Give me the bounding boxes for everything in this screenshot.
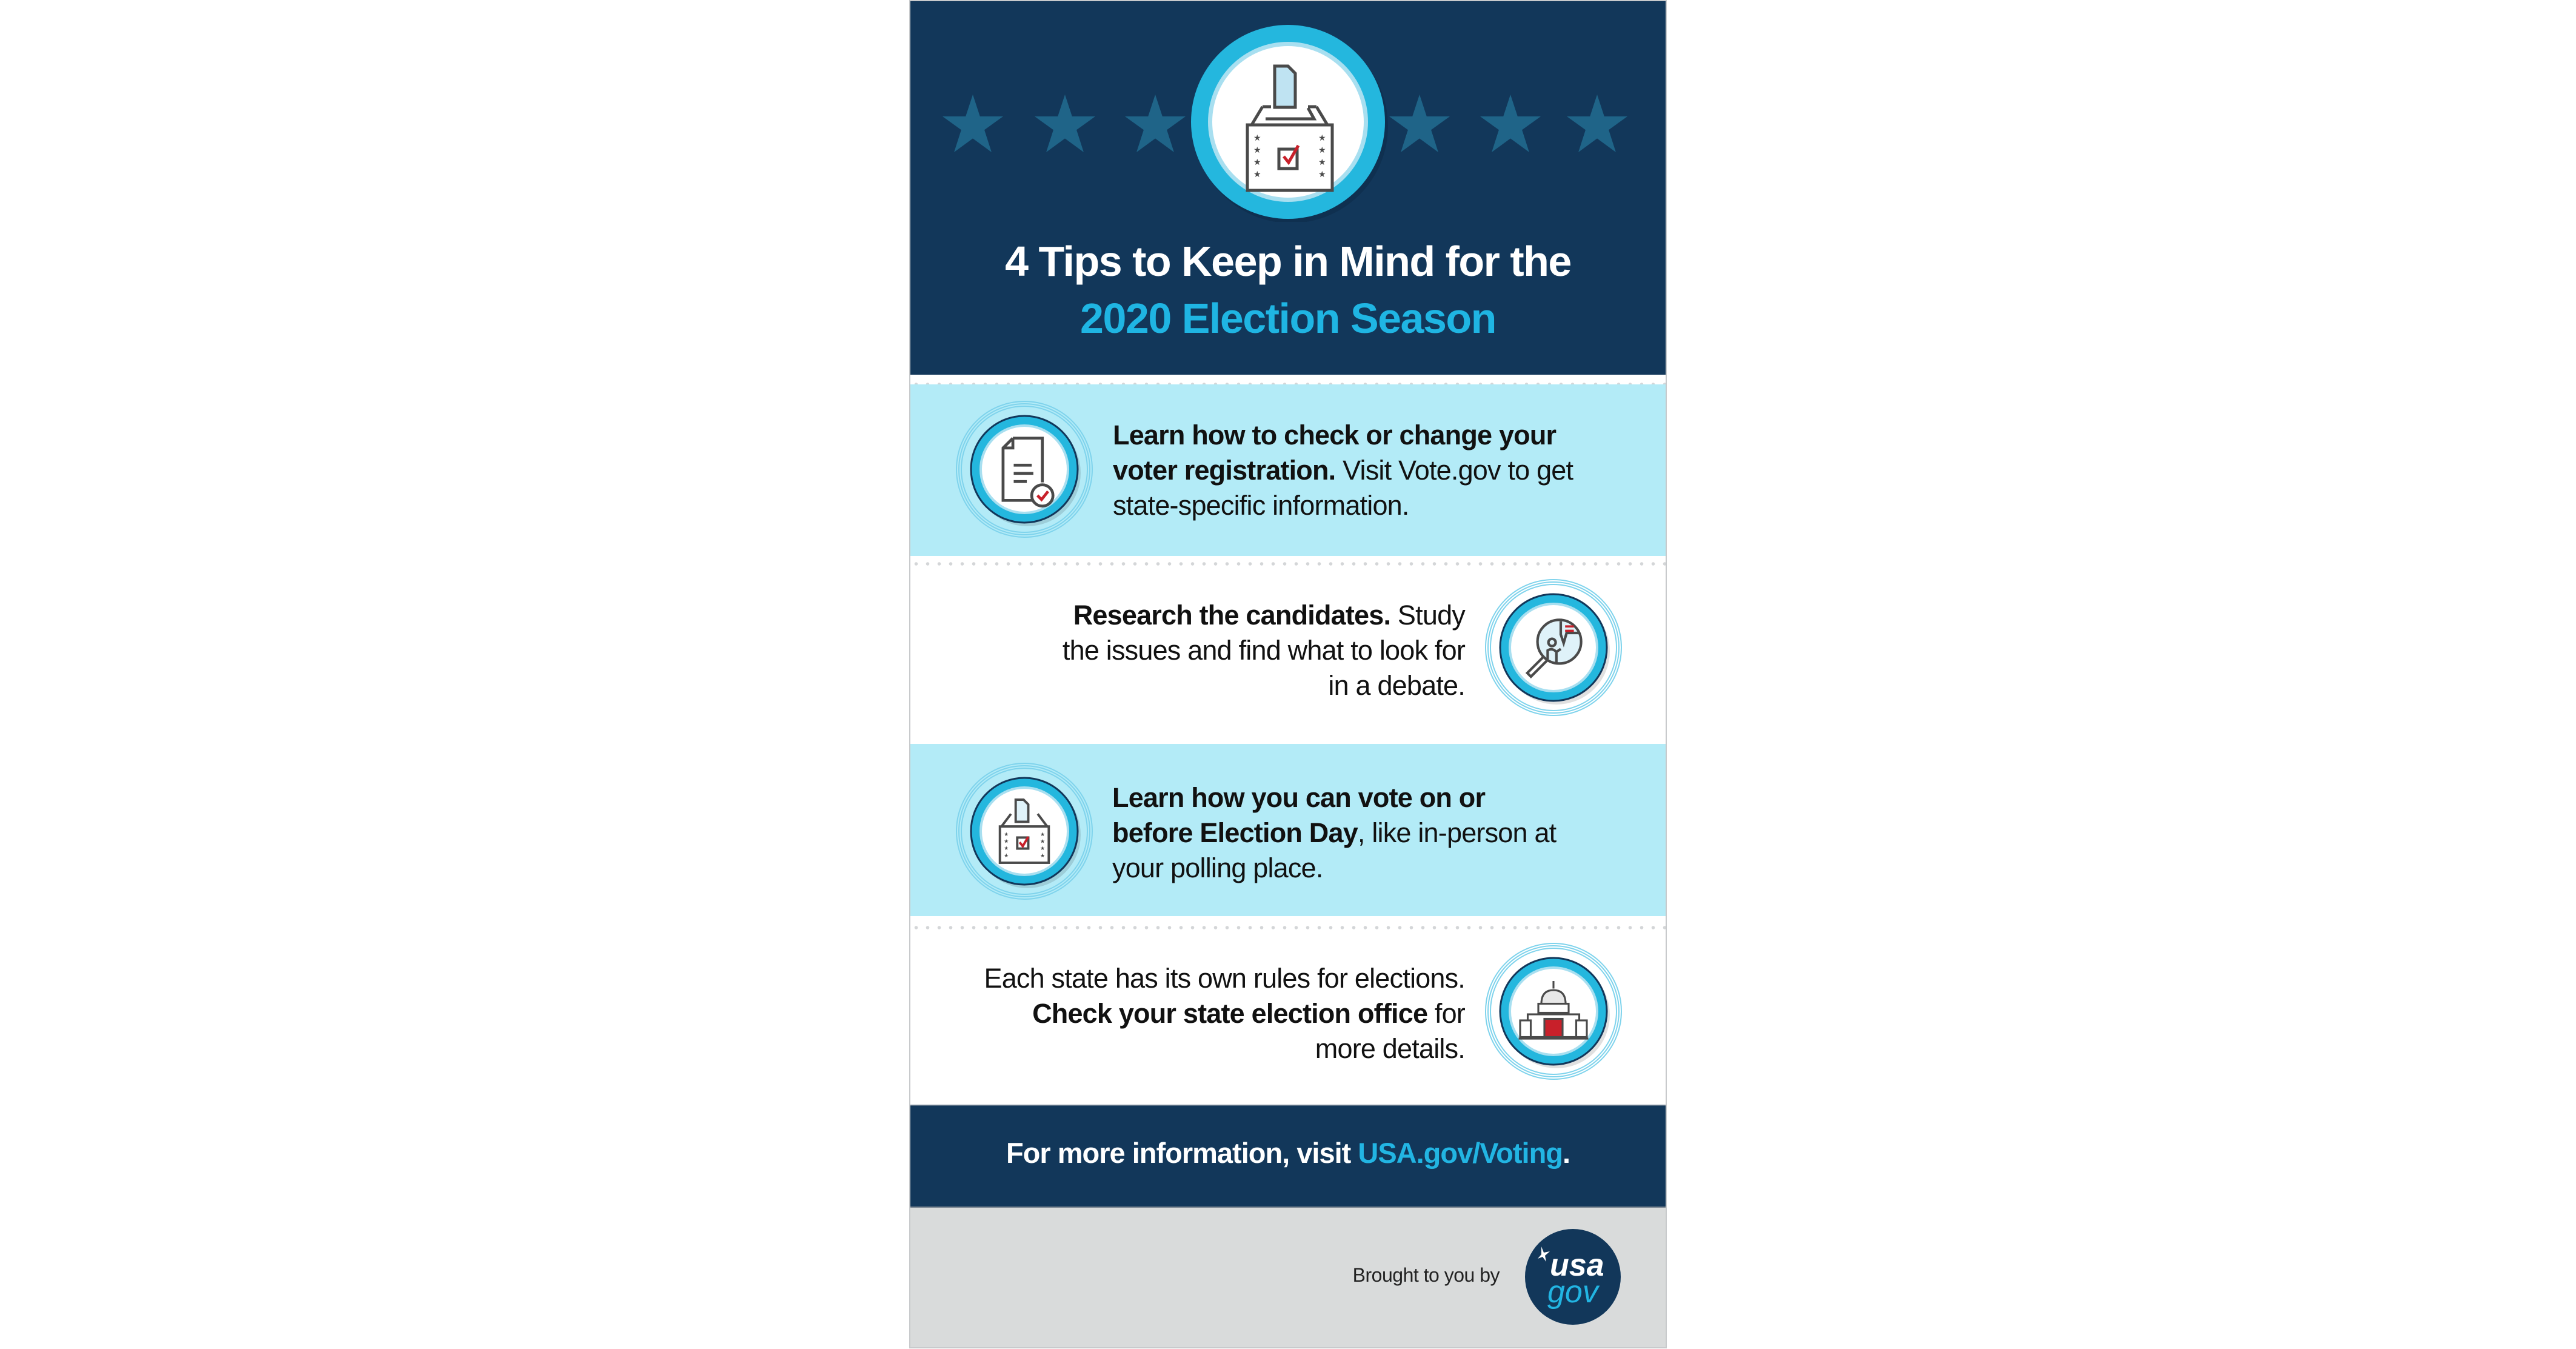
text: tip 4: more details.: [1315, 1033, 1465, 1064]
logo: usa gov: gov: [1547, 1274, 1600, 1310]
panel: tip 2: [910, 567, 1666, 744]
icon: ballot box main: [1191, 25, 1388, 222]
icon: ballot box main: ★: [1318, 158, 1326, 167]
footer: more info: [910, 1105, 1666, 1208]
text: tip 4: Each state has its own rules for elections.: [984, 963, 1465, 994]
icon: ballot box main: ★: [1318, 170, 1326, 179]
icon: ballot box main: ★: [1318, 146, 1326, 155]
dots: [910, 383, 1666, 386]
panel: tip 3: [910, 744, 1666, 916]
stars row: [943, 95, 1627, 152]
dots: [910, 926, 1666, 929]
text: tip 3: Learn how you can vote on or: [1112, 782, 1485, 813]
icon: ballot box main: ★: [1253, 170, 1261, 179]
icon: ballot box: ★: [1004, 846, 1009, 852]
icon: ballot box: ★: [1004, 853, 1009, 859]
text: tip 2: Research the candidates. Study: [1073, 600, 1465, 631]
text: tip 2: [1063, 600, 1466, 701]
icon: magnifier research: [1485, 579, 1622, 716]
text: tip 1: state-specific information.: [1113, 490, 1409, 521]
text: tip 4: [984, 963, 1465, 1064]
text: tip 3: before Election Day, like in-person at: [1112, 817, 1556, 848]
title: 2020 Election Season: [1080, 295, 1496, 342]
dots: [910, 562, 1666, 566]
text: tip 2: in a debate.: [1328, 670, 1465, 701]
logo: usa gov: [1525, 1229, 1621, 1325]
icon: registration document: [956, 401, 1093, 538]
panel frame: [909, 0, 1667, 1348]
title: 4 Tips to Keep in Mind for the: [1005, 238, 1571, 285]
header panel: [910, 1, 1666, 375]
icon: ballot box main: ★: [1318, 133, 1326, 143]
icon: ballot box: ★: [1040, 832, 1045, 838]
text: tip 1: [1113, 420, 1573, 521]
text: tip 1: Learn how to check or change your: [1113, 420, 1556, 450]
credit band: [910, 1208, 1666, 1347]
text: tip 3: your polling place.: [1112, 852, 1323, 883]
icon: ballot box: [956, 763, 1093, 900]
text: tip 3: [1112, 782, 1557, 883]
panel: tip 1: [910, 384, 1666, 556]
icon: ballot box main: ★: [1253, 146, 1261, 155]
title: [1005, 238, 1571, 342]
text: tip 4: Check your state election office for: [1032, 998, 1465, 1029]
text: tip 1: voter registration. Visit Vote.gov to get: [1113, 455, 1573, 486]
logo: usa gov: usa: [1550, 1248, 1604, 1283]
icon: ballot box main: ★: [1253, 133, 1261, 143]
icon: ballot box: ★: [1004, 839, 1009, 845]
text: tip 2: the issues and find what to look for: [1063, 635, 1465, 666]
icon: ballot box: ★: [1004, 832, 1009, 838]
text: brought to you by: Brought to you by: [1353, 1264, 1500, 1286]
panel: tip 4: [910, 931, 1666, 1105]
icon: capitol building: [1485, 943, 1622, 1080]
icon: ballot box main: ★: [1253, 158, 1261, 167]
footer: more info: For more information, visit USA.gov/Voting.: [1006, 1137, 1570, 1169]
icon: ballot box: ★: [1040, 846, 1045, 852]
icon: ballot box: ★: [1040, 853, 1045, 859]
icon: ballot box: ★: [1040, 839, 1045, 845]
